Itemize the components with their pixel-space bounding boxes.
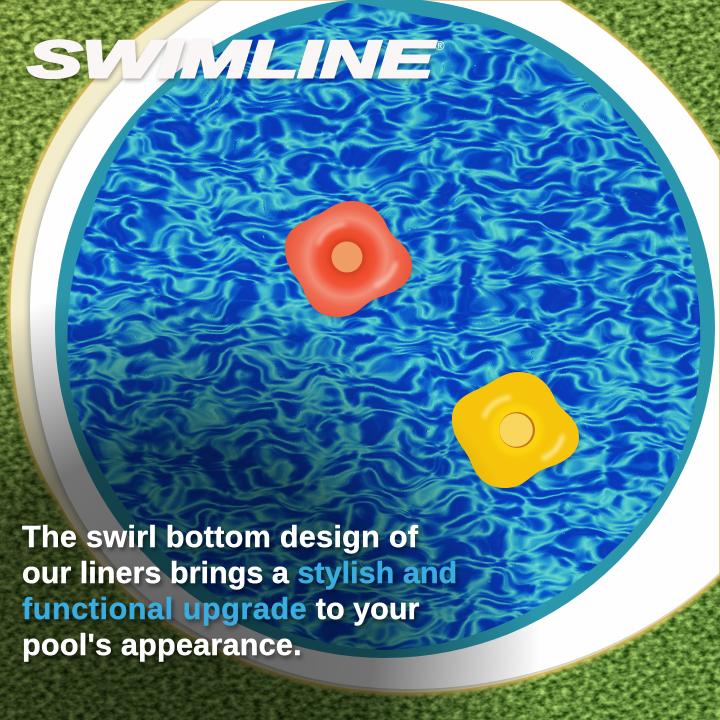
caption text: functional upgrade to your [22,592,419,626]
brand logo: Swimline: SWIMLINE [28,31,435,89]
red inflatable float [285,201,414,320]
brand logo: Swimline [28,31,445,89]
brand logo: Swimline: ® [435,38,445,53]
caption text: The swirl bottom design of [22,520,418,554]
caption text [22,520,460,666]
caption text: pool's appearance. [22,628,302,662]
yellow inflatable float [452,372,580,491]
caption text: our liners brings a stylish and [22,556,457,590]
